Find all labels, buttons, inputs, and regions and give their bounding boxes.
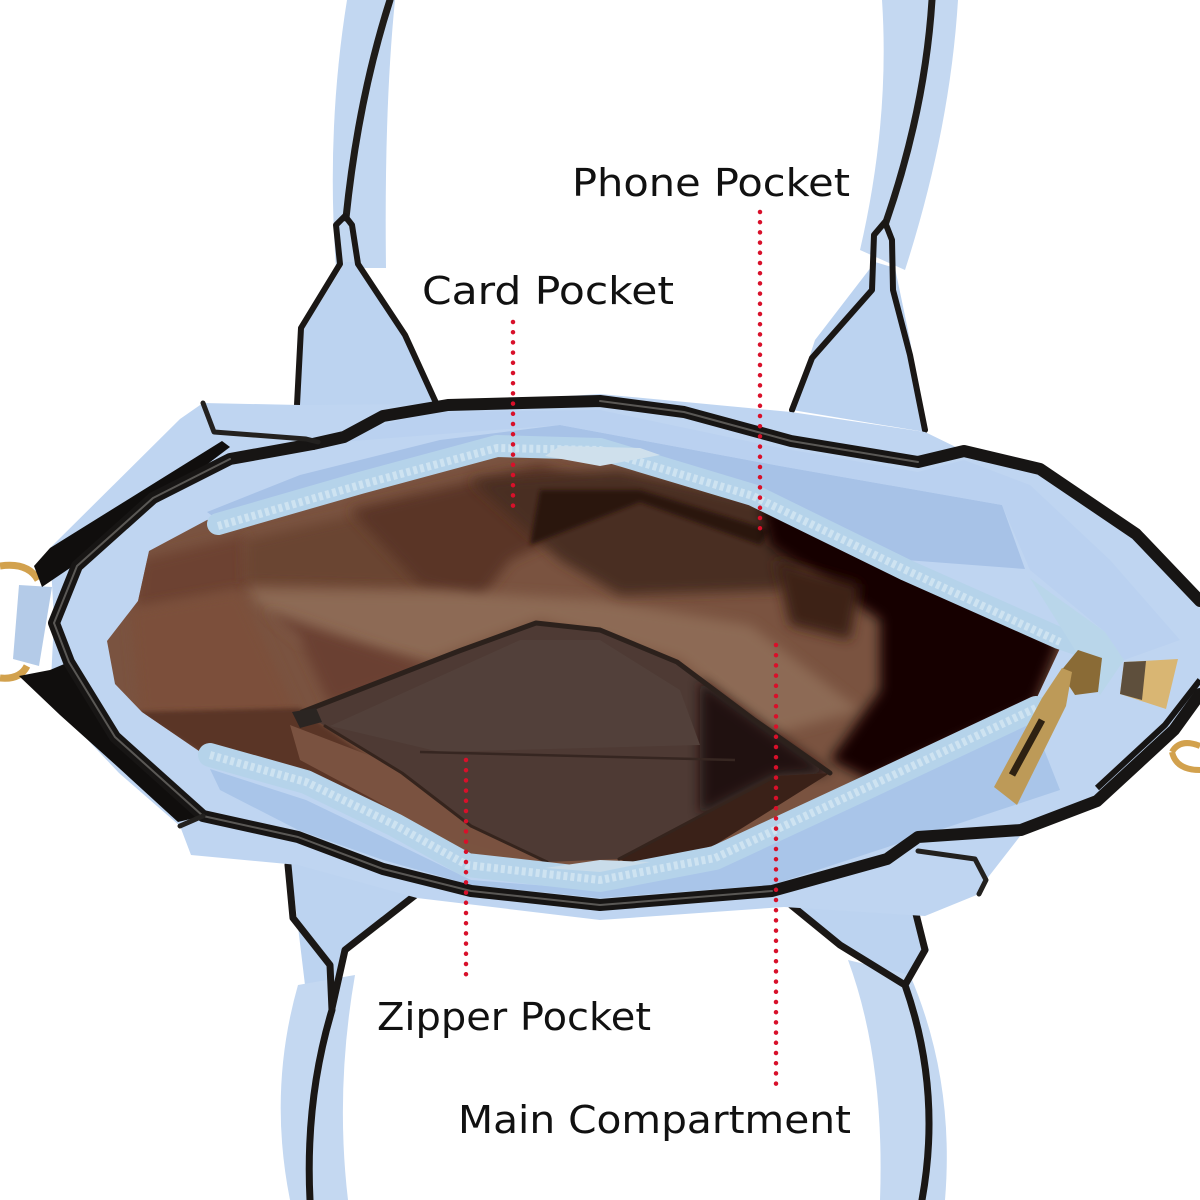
interior lining [107,457,1060,864]
label: phone pocket: Phone Pocket [572,161,850,205]
label: main compartment: Main Compartment [458,1098,851,1142]
lining shading [134,537,246,606]
top right handle [792,0,958,432]
rim: black piping [54,401,1200,905]
lower pocket flap [210,719,1060,898]
label: zipper pocket: Zipper Pocket [377,995,651,1039]
bag body [19,394,1200,920]
right strap ring [1172,743,1200,770]
zipper pull [994,650,1178,805]
top left handle [297,0,437,408]
dotted line: card pocket [511,322,515,506]
dotted line: zipper pocket [464,760,468,980]
label: card pocket: Card Pocket [422,269,674,313]
bottom right handle [791,880,947,1200]
zipper pocket [302,623,830,862]
dotted line: phone pocket [758,212,762,530]
left strap rings [0,565,52,678]
left dark gusset [34,441,230,587]
upper pocket flap [207,410,1180,660]
dotted line: main compartment [774,645,778,1088]
lower zipper [210,708,1036,880]
bottom left handle [281,860,418,1200]
upper zipper [218,446,1124,695]
